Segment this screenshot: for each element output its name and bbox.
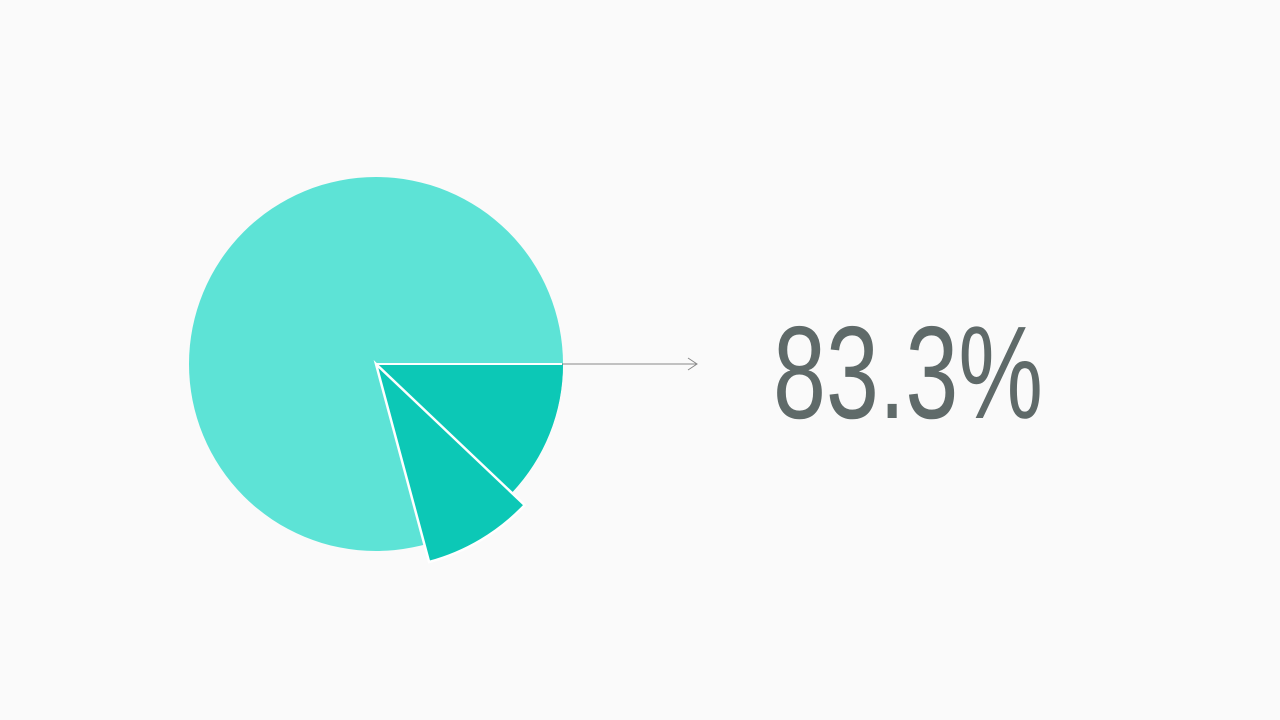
- pie chart: [189, 177, 563, 562]
- arrow: [376, 358, 697, 370]
- pie slice: dark: [376, 364, 563, 493]
- pie slice: main: [189, 177, 563, 551]
- pie slice: exploded: [376, 364, 525, 562]
- value label: 83.3%: [773, 299, 1043, 446]
